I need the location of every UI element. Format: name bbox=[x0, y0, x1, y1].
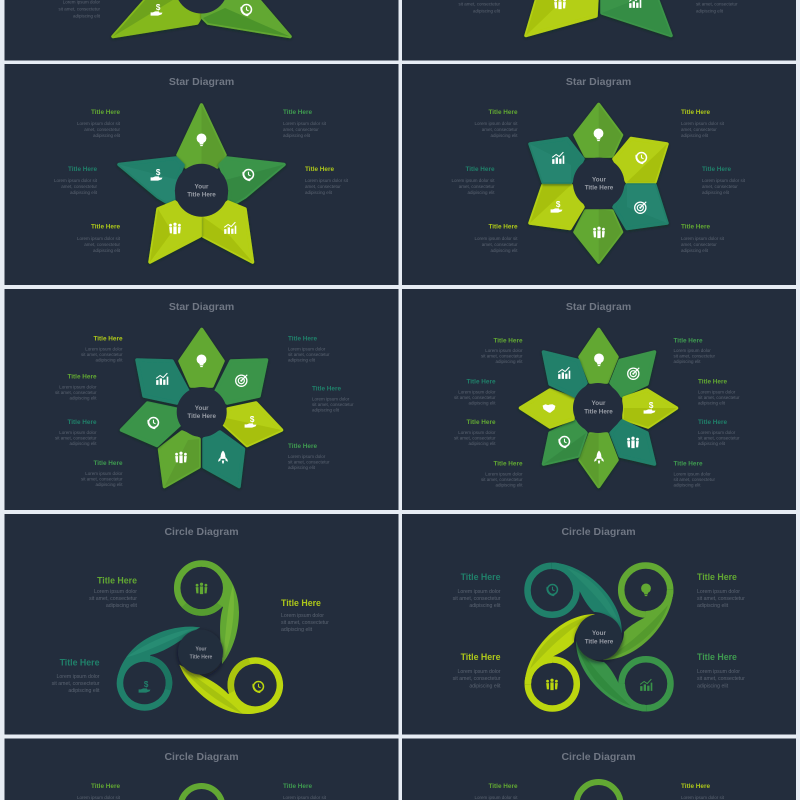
heading: Circle Diagram bbox=[561, 526, 636, 538]
label: lower left: Lorem ipsum dolor bbox=[57, 674, 100, 680]
text block: cropped right description: adipiscing elit bbox=[696, 8, 724, 14]
star point: lower left bbox=[526, 0, 597, 36]
label: right 3: Title Here bbox=[288, 443, 317, 450]
swirl: upper right green bbox=[603, 566, 673, 660]
panel: three part circle diagram bbox=[4, 514, 398, 734]
icon: target bbox=[628, 368, 639, 379]
petal: bottom bbox=[575, 209, 622, 262]
text block: cropped right description: sit amet, consectetur bbox=[696, 2, 738, 6]
label: right 1: Title Here bbox=[674, 338, 703, 344]
label: right 4: Lorem ipsum dolor bbox=[674, 472, 711, 476]
label: upper left: Title Here bbox=[91, 109, 120, 116]
heading: Star Diagram bbox=[566, 76, 631, 88]
label: middle left: Title Here bbox=[465, 166, 495, 173]
label: right 2: sit amet, consectetur bbox=[698, 395, 740, 400]
label: lower left: amet, consectetur bbox=[482, 242, 518, 247]
label: left 2: sit amet, consectetur bbox=[454, 395, 496, 400]
icon: rocket bbox=[594, 451, 604, 464]
swirl: top green bbox=[177, 560, 239, 664]
label: lower left: amet, consectetur bbox=[84, 242, 120, 247]
center circle bbox=[178, 630, 223, 674]
label: right: Lorem ipsum dolor sit bbox=[283, 795, 327, 800]
swirl: upper left teal bbox=[528, 563, 622, 633]
petal: upper right bbox=[216, 360, 266, 403]
label: left 1: Lorem ipsum dolor bbox=[485, 348, 523, 353]
label: upper right: Lorem ipsum dolor bbox=[697, 589, 740, 595]
label: left 1: adipiscing elit bbox=[495, 359, 523, 364]
label: left 4: sit amet, consectetur bbox=[81, 476, 123, 482]
label: middle right: Lorem ipsum dolor sit bbox=[702, 178, 746, 183]
label: upper right: adipiscing elit bbox=[283, 133, 311, 138]
label: middle right bbox=[702, 166, 746, 195]
ring: green (cropped) bbox=[180, 786, 222, 800]
label: left: Lorem ipsum dolor sit bbox=[77, 795, 121, 800]
star point: lower right bbox=[203, 202, 252, 262]
icon: phone clock bbox=[558, 437, 569, 448]
label: middle left: Lorem ipsum dolor sit bbox=[54, 178, 98, 183]
label: left 3: Lorem ipsum dolor bbox=[59, 430, 97, 435]
label: right 1 bbox=[288, 336, 330, 362]
center circle: Title Here bbox=[187, 413, 216, 420]
label: left 4: Lorem ipsum dolor bbox=[85, 471, 123, 476]
label: middle right: amet, consectetur bbox=[305, 184, 341, 189]
label: right 3: Title Here bbox=[698, 419, 727, 426]
label: right 1 bbox=[674, 338, 716, 364]
label: upper right: adipiscing elit bbox=[681, 133, 709, 138]
label: right: Lorem ipsum dolor sit bbox=[681, 795, 725, 800]
label: lower right: Lorem ipsum dolor bbox=[697, 669, 740, 675]
label: right bbox=[281, 598, 329, 633]
text block: cropped description bbox=[58, 0, 101, 18]
label: upper left: adipiscing elit bbox=[469, 603, 501, 609]
label: lower left bbox=[474, 224, 518, 253]
label: right: adipiscing elit bbox=[281, 627, 313, 633]
heading: Star Diagram bbox=[169, 76, 234, 88]
petal: top bbox=[575, 104, 622, 158]
panel: eight point star diagram bbox=[402, 289, 796, 510]
center circle: Title Here bbox=[187, 192, 216, 198]
icon: phone clock bbox=[635, 153, 646, 164]
label: right 4: Title Here bbox=[674, 460, 703, 468]
icon: hand bbox=[139, 680, 150, 693]
petal: upper left bbox=[544, 352, 586, 396]
icon: people bbox=[196, 583, 207, 594]
panel: four part circle diagram bbox=[402, 514, 796, 734]
petal: upper left bbox=[530, 138, 583, 182]
icon: people bbox=[546, 679, 558, 690]
label: right 2 bbox=[312, 386, 354, 412]
label: upper left bbox=[89, 576, 138, 609]
panel: six point star diagram bbox=[402, 64, 796, 285]
center circle bbox=[175, 164, 228, 217]
icon: phone clock bbox=[240, 5, 251, 16]
label: left 1: Lorem ipsum dolor bbox=[85, 346, 123, 352]
label: lower left bbox=[77, 224, 121, 253]
star point: right bbox=[220, 158, 284, 203]
center circle: Your bbox=[592, 176, 606, 184]
petal: lower right bbox=[614, 185, 667, 228]
label: upper right bbox=[697, 572, 745, 609]
icon: people bbox=[554, 0, 566, 9]
label: middle left: amet, consectetur bbox=[61, 184, 97, 189]
icon: people bbox=[593, 227, 605, 238]
label: left 2: adipiscing elit bbox=[69, 396, 97, 400]
petal: lower right bbox=[611, 421, 654, 464]
label: upper right: Title Here bbox=[697, 572, 737, 582]
petal: left bbox=[122, 403, 180, 446]
label: lower right: Title Here bbox=[681, 224, 710, 230]
label: middle left: amet, consectetur bbox=[459, 184, 495, 189]
label: left 2 bbox=[55, 374, 97, 400]
label: middle left: adipiscing elit bbox=[467, 190, 495, 195]
label: lower right: Title Here bbox=[697, 652, 737, 662]
star point: lower right bbox=[602, 0, 671, 36]
label: right bbox=[681, 783, 725, 800]
icon: hand with dollar bbox=[151, 168, 162, 181]
label: right 1: adipiscing elit bbox=[674, 359, 701, 364]
label: right 3: Lorem ipsum dolor bbox=[698, 430, 736, 435]
label: right 2: sit amet, consectetur bbox=[312, 402, 354, 407]
icon: hand bbox=[245, 415, 256, 428]
icon: people bbox=[169, 223, 181, 234]
label: lower left: sit amet, consectetur bbox=[52, 681, 100, 687]
text block: cropped left description: adipiscing elit bbox=[473, 8, 501, 14]
label: left 3: sit amet, consectetur bbox=[454, 436, 496, 440]
center circle bbox=[573, 383, 623, 433]
label: left: Title Here bbox=[488, 783, 518, 790]
label: left: Lorem ipsum dolor sit bbox=[474, 795, 518, 800]
panel: star diagram top left (cropped) bbox=[4, 0, 398, 60]
label: upper right: sit amet, consectetur bbox=[697, 596, 745, 602]
swirl: left teal bbox=[102, 613, 223, 718]
label: right 2: adipiscing elit bbox=[698, 400, 726, 406]
label: upper left: Lorem ipsum dolor bbox=[458, 589, 501, 595]
label: left 4 bbox=[481, 460, 523, 488]
label: left 2: Title Here bbox=[67, 374, 97, 380]
label: left 4 bbox=[81, 460, 123, 487]
label: right 2: adipiscing elit bbox=[312, 408, 340, 412]
label: left 3: sit amet, consectetur bbox=[55, 436, 97, 440]
petal: right bbox=[624, 390, 676, 427]
label: upper right bbox=[283, 109, 327, 138]
label: lower right bbox=[697, 652, 745, 690]
label: middle right bbox=[305, 166, 349, 195]
label: upper right: Title Here bbox=[283, 109, 312, 116]
label: left 2: Lorem ipsum dolor bbox=[458, 390, 496, 394]
label: right 2: Title Here bbox=[698, 378, 727, 386]
label: left 4: Title Here bbox=[493, 460, 523, 468]
icon: target bbox=[635, 202, 646, 213]
label: upper right: Title Here bbox=[681, 109, 710, 116]
icon: hand bbox=[551, 200, 562, 213]
label: lower right: Lorem ipsum dolor sit bbox=[681, 236, 725, 241]
label: left 3: Lorem ipsum dolor bbox=[458, 430, 496, 435]
icon: chart bbox=[224, 222, 236, 234]
swirl: right lime bbox=[171, 626, 291, 731]
panel: seven point star diagram bbox=[4, 289, 398, 510]
label: middle left: Lorem ipsum dolor sit bbox=[451, 178, 495, 183]
label: middle left: Title Here bbox=[68, 166, 97, 173]
heading: Circle Diagram bbox=[561, 751, 636, 763]
label: right 1: adipiscing elit bbox=[288, 358, 316, 362]
label: right 3: adipiscing elit bbox=[698, 441, 726, 446]
petal: upper left bbox=[137, 360, 188, 403]
icon: target bbox=[236, 375, 247, 386]
label: middle right: adipiscing elit bbox=[702, 190, 730, 195]
label: upper left: Title Here bbox=[488, 109, 518, 116]
icon: hand bbox=[644, 401, 655, 414]
swirl: lower right mid green bbox=[576, 641, 670, 711]
label: right: Title Here bbox=[283, 783, 312, 790]
center circle: Title Here bbox=[585, 638, 614, 646]
label: lower left: adipiscing elit bbox=[68, 688, 100, 694]
ring: green (cropped) bbox=[576, 782, 620, 800]
icon: phone clock bbox=[252, 682, 263, 693]
petal: top bbox=[180, 330, 223, 386]
label: right 3: sit amet, consectetur bbox=[288, 460, 330, 464]
label: middle right: Title Here bbox=[305, 166, 334, 173]
label: middle right: Title Here bbox=[702, 166, 731, 173]
label: upper left: amet, consectetur bbox=[84, 127, 120, 132]
label: left 1: sit amet, consectetur bbox=[481, 354, 523, 358]
label: right bbox=[283, 783, 327, 800]
panel: five point star diagram bbox=[4, 64, 398, 285]
petal: lower right bbox=[204, 432, 244, 486]
label: middle right: adipiscing elit bbox=[305, 190, 333, 195]
label: lower left: adipiscing elit bbox=[469, 684, 501, 690]
icon: hand with dollar bbox=[151, 3, 162, 16]
petal: bottom bbox=[580, 432, 617, 486]
label: left 1: Title Here bbox=[93, 336, 123, 342]
label: left 3: adipiscing elit bbox=[468, 441, 496, 446]
label: lower left: sit amet, consectetur bbox=[453, 676, 501, 682]
label: middle left bbox=[54, 166, 98, 195]
label: right 4 bbox=[674, 460, 716, 488]
label: upper right: amet, consectetur bbox=[283, 127, 319, 132]
label: right 1: sit amet, consectetur bbox=[674, 354, 716, 358]
star point: lower left bbox=[113, 0, 200, 36]
label: right: Title Here bbox=[681, 783, 710, 790]
label: right 1: Lorem ipsum dolor bbox=[288, 346, 326, 352]
icon: people bbox=[175, 452, 187, 463]
star point: lower left bbox=[150, 202, 200, 262]
icon: chart bbox=[552, 152, 564, 164]
label: upper right: Lorem ipsum dolor sit bbox=[681, 121, 725, 126]
petal: top bbox=[580, 330, 617, 382]
label: middle left bbox=[451, 166, 495, 195]
label: right 2: Title Here bbox=[312, 386, 341, 392]
petal: left bbox=[520, 390, 573, 427]
label: upper left: adipiscing elit bbox=[490, 133, 518, 138]
center circle: Your bbox=[195, 646, 207, 652]
label: left 2 bbox=[454, 378, 496, 406]
icon: chart bbox=[156, 373, 168, 385]
petal: upper right bbox=[614, 138, 667, 182]
label: upper left: sit amet, consectetur bbox=[453, 596, 501, 602]
label: upper left: Lorem ipsum dolor sit bbox=[474, 121, 518, 126]
label: upper left: Title Here bbox=[97, 576, 137, 586]
label: left bbox=[474, 783, 518, 800]
swirl: lower left lime bbox=[525, 614, 595, 708]
star point: top bbox=[178, 105, 225, 170]
label: right 2: Lorem ipsum dolor bbox=[698, 390, 736, 394]
heading: Star Diagram bbox=[169, 301, 234, 313]
star point: lower right bbox=[203, 0, 290, 36]
label: left: Title Here bbox=[91, 783, 120, 790]
label: left bbox=[77, 783, 121, 800]
label: lower right: sit amet, consectetur bbox=[697, 676, 745, 682]
label: right: sit amet, consectetur bbox=[281, 620, 329, 626]
label: lower left: Title Here bbox=[461, 652, 501, 662]
label: right 3: sit amet, consectetur bbox=[698, 436, 740, 440]
icon: bulb bbox=[594, 353, 604, 366]
icon: people bbox=[627, 437, 639, 448]
label: left 1: sit amet, consectetur bbox=[81, 352, 123, 357]
label: right 3 bbox=[698, 419, 740, 446]
label: lower left bbox=[453, 652, 501, 690]
petal: lower left bbox=[530, 185, 583, 228]
label: right: Lorem ipsum dolor bbox=[281, 613, 324, 619]
panel: circle diagram bottom right (cropped) bbox=[402, 738, 796, 800]
center circle bbox=[576, 614, 622, 660]
icon: rocket bbox=[218, 451, 228, 464]
label: left 2: Lorem ipsum dolor bbox=[59, 384, 97, 390]
petal: right bbox=[224, 403, 282, 446]
label: left 3: Title Here bbox=[466, 419, 496, 426]
label: left 2: sit amet, consectetur bbox=[55, 390, 97, 395]
center circle: Your bbox=[592, 400, 606, 407]
center circle: Your bbox=[195, 405, 209, 412]
text block: cropped left description: sit amet, consectetur bbox=[458, 2, 500, 6]
label: upper left bbox=[453, 572, 501, 609]
label: right 4: adipiscing elit bbox=[674, 482, 701, 488]
label: left 1: Title Here bbox=[493, 338, 523, 344]
label: lower left: Lorem ipsum dolor bbox=[458, 669, 501, 675]
text block: cropped description: sit amet, consectetur bbox=[58, 6, 100, 12]
icon: chart bbox=[558, 367, 570, 379]
panel: star diagram top right (cropped) bbox=[402, 0, 796, 61]
label: upper left bbox=[77, 109, 121, 138]
label: left 1 bbox=[81, 336, 123, 362]
label: lower left: adipiscing elit bbox=[93, 248, 121, 253]
label: left 3 bbox=[55, 419, 97, 446]
label: left 4: Lorem ipsum dolor bbox=[485, 472, 523, 476]
label: right 1: sit amet, consectetur bbox=[288, 352, 330, 357]
star point: left bbox=[119, 158, 183, 203]
heading: Star Diagram bbox=[566, 301, 631, 313]
label: lower left: Lorem ipsum dolor sit bbox=[77, 236, 121, 241]
label: left 4: adipiscing elit bbox=[495, 482, 523, 488]
label: lower right: amet, consectetur bbox=[681, 242, 717, 247]
label: lower right bbox=[681, 224, 725, 253]
label: lower left: Title Here bbox=[488, 224, 518, 230]
label: upper left bbox=[474, 109, 518, 138]
label: left 2: Title Here bbox=[466, 378, 496, 386]
label: upper left: amet, consectetur bbox=[482, 127, 518, 132]
label: right 3 bbox=[288, 443, 330, 470]
center circle: Your bbox=[592, 630, 606, 637]
heading: Circle Diagram bbox=[164, 751, 239, 763]
icon: chart bbox=[640, 679, 652, 691]
icon: phone clock bbox=[242, 170, 253, 181]
label: lower right: adipiscing elit bbox=[681, 248, 709, 253]
label: lower left bbox=[52, 658, 100, 694]
label: left 1: adipiscing elit bbox=[95, 358, 123, 362]
panel: circle diagram bottom left (cropped) bbox=[4, 738, 398, 800]
label: right 3: Lorem ipsum dolor bbox=[288, 454, 326, 459]
text block: cropped right description bbox=[696, 2, 738, 14]
label: right 2 bbox=[698, 378, 740, 406]
icon: bulb bbox=[197, 133, 206, 146]
label: upper left: Title Here bbox=[461, 572, 501, 582]
label: lower right: adipiscing elit bbox=[697, 684, 729, 690]
center circle bbox=[175, 0, 228, 14]
text block: cropped left description bbox=[458, 2, 501, 14]
icon: bulb bbox=[641, 583, 651, 596]
label: left 4: Title Here bbox=[93, 460, 123, 467]
center circle: Title Here bbox=[584, 408, 613, 416]
icon: chart bbox=[629, 0, 641, 8]
label: middle left: adipiscing elit bbox=[70, 190, 98, 195]
label: right 3: adipiscing elit bbox=[288, 465, 316, 470]
label: left 3: adipiscing elit bbox=[69, 441, 97, 446]
center circle bbox=[177, 387, 227, 437]
label: left 3: Title Here bbox=[67, 419, 97, 426]
petal: lower left bbox=[160, 432, 199, 486]
label: right 1: Lorem ipsum dolor bbox=[674, 348, 711, 353]
label: upper left: sit amet, consectetur bbox=[89, 596, 137, 602]
label: upper left: adipiscing elit bbox=[93, 133, 121, 138]
label: middle right: Lorem ipsum dolor sit bbox=[305, 178, 349, 183]
label: left 4: adipiscing elit bbox=[95, 482, 123, 487]
label: right: Title Here bbox=[281, 598, 321, 608]
label: left 3 bbox=[454, 419, 496, 446]
icon: bulb bbox=[197, 354, 206, 367]
label: right 2: Lorem ipsum dolor bbox=[312, 396, 350, 402]
label: right 4: sit amet, consectetur bbox=[674, 477, 716, 482]
label: lower left: Lorem ipsum dolor sit bbox=[474, 236, 518, 241]
label: upper right bbox=[681, 109, 725, 138]
center circle bbox=[573, 158, 624, 209]
label: lower left: adipiscing elit bbox=[490, 248, 518, 253]
label: right 1: Title Here bbox=[288, 336, 317, 342]
icon: handshake bbox=[543, 404, 555, 413]
center circle: Title Here bbox=[190, 654, 213, 660]
heading: Circle Diagram bbox=[164, 526, 239, 538]
center circle: Your bbox=[195, 184, 209, 190]
label: left 1 bbox=[481, 338, 523, 364]
center circle: Title Here bbox=[585, 184, 614, 192]
icon: phone clock bbox=[546, 585, 557, 596]
label: upper left: Lorem ipsum dolor sit bbox=[77, 121, 121, 126]
icon: bulb bbox=[594, 128, 603, 141]
label: lower left: Title Here bbox=[91, 224, 120, 230]
label: middle right: amet, consectetur bbox=[702, 184, 738, 189]
petal: lower left bbox=[544, 421, 586, 464]
text block: cropped description: adipiscing elit bbox=[73, 14, 101, 18]
label: lower left: Title Here bbox=[60, 658, 100, 668]
label: upper right: adipiscing elit bbox=[697, 603, 729, 609]
icon: phone clock bbox=[147, 418, 158, 429]
label: upper left: adipiscing elit bbox=[106, 603, 138, 609]
label: upper left: Lorem ipsum dolor bbox=[94, 589, 137, 595]
petal: upper right bbox=[611, 352, 654, 396]
label: upper right: Lorem ipsum dolor sit bbox=[283, 121, 327, 126]
label: left 2: adipiscing elit bbox=[468, 400, 496, 406]
label: left 4: sit amet, consectetur bbox=[481, 477, 523, 482]
label: upper right: amet, consectetur bbox=[681, 127, 717, 132]
